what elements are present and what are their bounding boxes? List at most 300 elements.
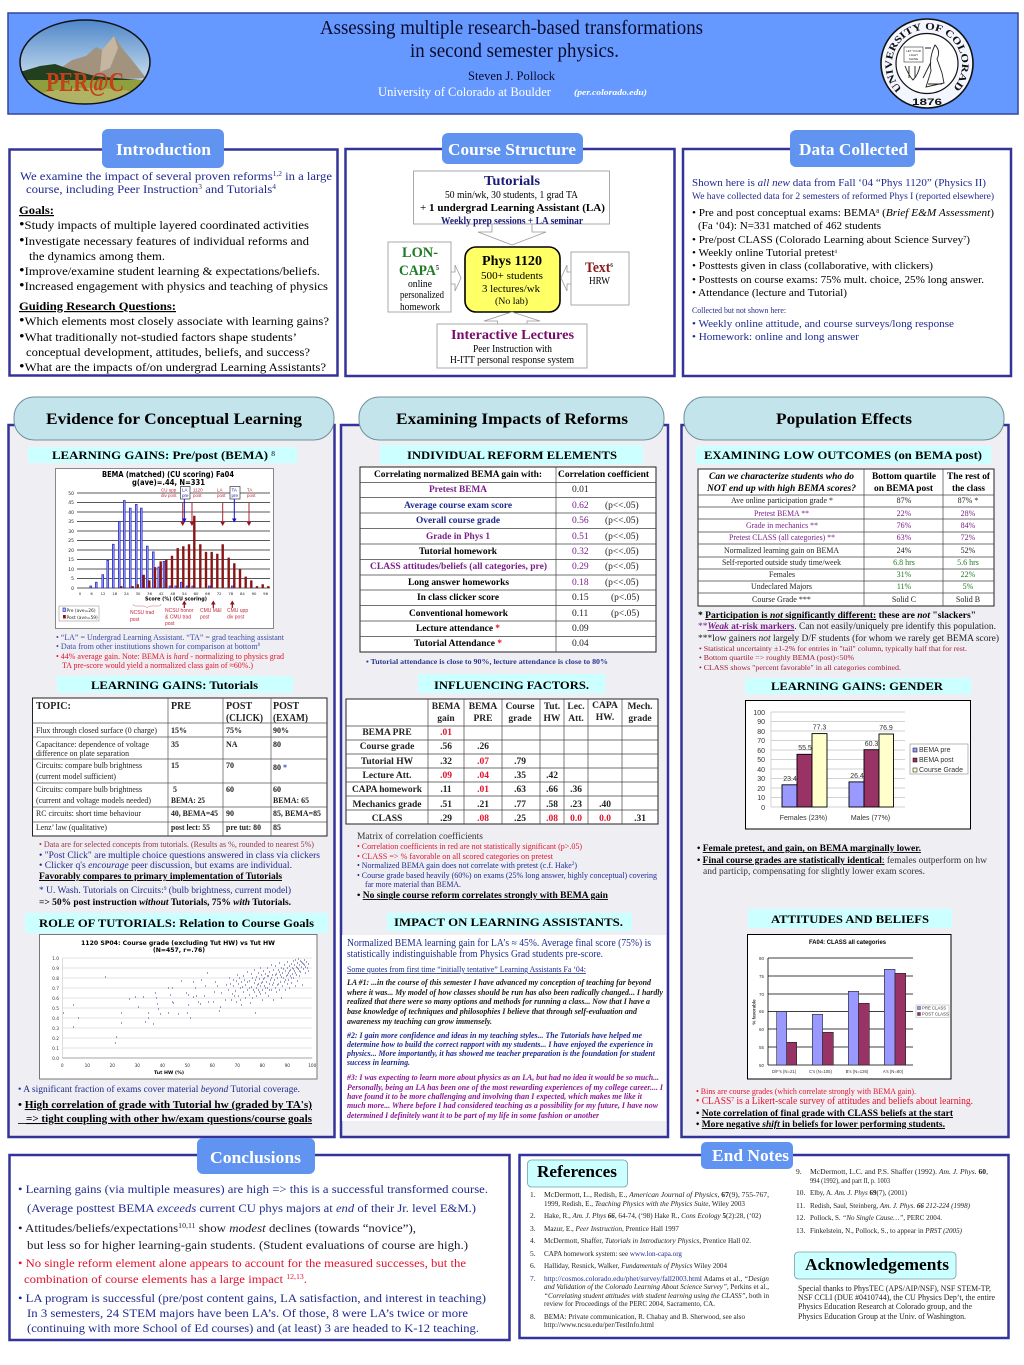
text: references 1-8: CAPA homework system: see www.lon-capa.org: [544, 1249, 682, 1258]
text: correlation matrix notes: • Course grade based heavily (60%) on exams (25% long answer, highly conceptual) covering: [357, 871, 657, 880]
bar chart: CLASS attitudes by grade: A's (N=80): [883, 1069, 904, 1074]
scatter plot: course grade vs tutorial homework: 70: [235, 1063, 240, 1069]
table: correlation matrix: .42: [546, 771, 558, 781]
annotations: other institutions: CMU M&I: [200, 608, 222, 614]
heading: Course Structure: Course Structure: [448, 140, 576, 159]
text: attitudes notes: 7: [731, 1097, 734, 1103]
panel: Conclusions: [10, 1138, 510, 1340]
table: correlation with BEMA gain: Conventional homework: [409, 608, 508, 618]
table: correlation matrix: .35: [514, 771, 526, 781]
legend: CLASS chart: PRE CLASS: [922, 1006, 946, 1011]
bar chart: BEMA pre/post histogram: 66: [205, 591, 211, 596]
table: correlation matrix: 0.0: [570, 814, 582, 824]
heading: Population Effects: [684, 397, 1004, 440]
bar chart: BEMA pre/post histogram: 42: [159, 591, 164, 596]
text: data collected list: (: [879, 207, 886, 219]
arrow: LON-CAPA to Phys 1120: [451, 265, 461, 291]
table: correlation matrix: .29: [440, 814, 452, 824]
text: introduction and goals: in a large: [282, 169, 332, 183]
bar chart: BEMA pre/post histogram: Score (%) (CU scoring): [145, 596, 207, 602]
text: low outcome notes: • CLASS shows "percent favorable" in all categories combined.: [699, 663, 901, 672]
annotations: other institutions: div post: [227, 614, 245, 620]
table: low outcome students: 5.6 hrs: [957, 558, 979, 567]
table: correlation with BEMA gain: Pretest BEMA: [429, 484, 488, 494]
box: Tutorials: + 1 undergrad Learning Assistant (LA): [420, 202, 605, 214]
box: Tutorials: Tutorials: [484, 174, 541, 189]
table: correlation matrix: Course grade: [360, 742, 414, 752]
box: LON-CAPA: personalized: [400, 290, 444, 301]
bar chart: BEMA pre/post histogram: 48: [170, 591, 176, 596]
annotations: other institutions: NCSU honor: [165, 608, 194, 614]
scatter plot: course grade vs tutorial homework: 0.7: [52, 986, 59, 992]
table: tutorial learning gains: Lenz’ law (qualitative): [36, 823, 107, 832]
bar chart: CLASS attitudes by grade: 75: [759, 974, 764, 979]
table: correlation matrix: .08: [546, 814, 558, 824]
text: low outcome notes: * Participation is not significantly different: these are not "slackers": [698, 611, 976, 621]
table: low outcome students: Pretest CLASS (all categories) **: [729, 533, 835, 542]
annotations: arrows for LA and TA scores: post: [217, 493, 226, 498]
text: introduction and goals: Goals:: [19, 203, 54, 217]
bar chart: CLASS attitudes by grade: [748, 934, 951, 1079]
subheading: Examining low outcomes: [696, 446, 991, 464]
table: correlation with BEMA gain: 0.04: [572, 639, 589, 649]
bar chart: BEMA pre/post histogram: 0: [71, 586, 74, 592]
legend: CLASS chart: POST CLASS: [922, 1012, 949, 1017]
annotations: arrows for LA and TA scores: pre: [232, 493, 239, 498]
annotations: other institutions: post: [200, 614, 210, 620]
table: correlation with BEMA gain: 0.15: [572, 593, 589, 603]
table: low outcome students: 24%: [897, 546, 912, 555]
scatter plot: course grade vs tutorial homework: 0.8: [52, 976, 59, 982]
subheading: Influencing factors: INFLUENCING FACTORS.: [434, 678, 589, 692]
text: introduction and goals: •Investigate necessary features of individual reforms and: [19, 233, 309, 249]
table: low outcome students: 76%: [897, 521, 912, 530]
text block: learning assistant quotes: realized that there were so many options and methods for running a class... Now that I have a: [347, 997, 650, 1006]
text: BEMA chart notes: • “LA” = Undergrad Learning Assistant. “TA” = grad teaching assistant: [56, 632, 285, 642]
scatter plot: course grade vs tutorial homework: 1120 SP04: Course grade (excluding Tut HW) vs Tut HW: [81, 939, 275, 947]
annotations: arrows for LA and TA scores: LA: [217, 488, 223, 493]
table: tutorial learning gains: PRE: [171, 701, 191, 712]
text: introduction and goals: •What traditionally not-studied factors shape students’: [19, 329, 297, 345]
bar chart: BEMA pre/post histogram: 84: [240, 591, 245, 596]
heading: Acknowledgements: Acknowledgements: [805, 1255, 949, 1274]
scatter plot: course grade vs tutorial homework: 0.3: [52, 1026, 59, 1032]
table: correlation matrix: .40: [599, 800, 611, 810]
bar chart: learning gains by gender: 76.9: [879, 725, 893, 732]
text: introduction and goals: 3: [198, 183, 203, 191]
text: data collected list: We have collected data for 2 semesters of reformed Phys I (reported elsewhere): [692, 191, 994, 202]
text: references 1-8: 2.: [530, 1211, 536, 1220]
scatter plot: course grade vs tutorial homework: 0.9: [52, 966, 59, 972]
text: conclusions list: 12,13: [286, 1273, 304, 1281]
text: introduction and goals: [19, 169, 332, 375]
scatter plot: course grade vs tutorial homework: 0.5: [52, 1006, 59, 1012]
heading: End Notes: End Notes: [712, 1146, 790, 1165]
icon: University of Colorado seal: [880, 18, 974, 109]
text: introduction and goals: •Improve/examine student learning & expectations/beliefs.: [19, 263, 320, 279]
bar chart: learning gains by gender: 100: [753, 710, 765, 717]
text: data collected list: 4: [834, 250, 838, 255]
bar chart: BEMA pre/post histogram: 18: [112, 591, 118, 596]
table: tutorial learning gains: 70: [226, 761, 234, 770]
text block: learning assistant quotes: determined I definitely want it to be part of my life in some fashion or another: [347, 1111, 600, 1120]
title: Assessing multiple research-based transformations: [320, 17, 703, 39]
text: data collected list: • Pre and post conceptual exams: BEMA: [692, 207, 872, 219]
bar chart: learning gains by gender: 20: [757, 786, 765, 793]
bar chart: BEMA pre/post histogram: 78: [228, 591, 234, 596]
bar chart: BEMA pre/post histogram: 60: [194, 591, 199, 596]
text: conclusions list: In 3 semesters, 24 STEM majors have been LA’s. Of those, 8 were LA’s twice or more: [27, 1308, 468, 1320]
box: Phys 1120: 500+ students: [481, 270, 543, 282]
scatter plot: course grade vs tutorial homework: 50: [185, 1063, 190, 1069]
scatter plot: course grade vs tutorial homework: 0: [61, 1063, 64, 1069]
text: low outcome notes: • Statistical uncertainty ±1-2% for entries in "tail" column, typically half that for rest.: [699, 644, 967, 653]
table: low outcome students: Solid B: [956, 595, 980, 604]
text: conclusions list: • Attitudes/beliefs/expectations: [18, 1223, 161, 1235]
annotations: arrows for LA and TA scores: 1120: [193, 488, 203, 493]
annotations: arrows for LA and TA scores: [161, 486, 256, 526]
scatter plot: course grade vs tutorial homework: 90: [285, 1063, 290, 1069]
table: tutorial learning gains: 15: [171, 761, 179, 770]
text: tutorial notes: • Clicker q's encourage peer discussion, but exams are individual.: [39, 861, 292, 871]
table: correlation matrix: .01: [440, 728, 452, 738]
bar chart: learning gains by gender: 80: [757, 729, 765, 736]
table: low outcome students: on BEMA post: [874, 484, 934, 494]
table: tutorial learning gains: 60: [226, 785, 234, 794]
annotations: other institutions: CMU upp: [227, 608, 248, 614]
bar chart: BEMA pre/post histogram: 10: [68, 567, 74, 573]
text: references 1-8: McDermott, L., Redish, E., American Journal of Physics, 67(9), 755-767,: [544, 1190, 769, 1199]
panel: End Notes: [520, 1142, 1008, 1338]
bar chart: learning gains by gender: [746, 700, 970, 829]
text: acknowledgements: Special thanks to PhysTEC (APS/AIP/NSF), NSF STEM-TP,: [798, 1283, 991, 1293]
bar chart: CLASS attitudes by grade: D/F's (N=21): [772, 1069, 797, 1074]
box: Phys 1120: Phys 1120: [482, 254, 542, 269]
logo: PER@C: PER@C: [46, 67, 124, 97]
text: conclusions list: (continuing with more School of Ed courses) and (at least) 3 are headed to K-12 teaching.: [27, 1323, 479, 1335]
table: correlation with BEMA gain: Correlation coefficient: [558, 469, 649, 479]
table: correlation with BEMA gain: 0.29: [572, 562, 589, 572]
text: references 9-13: McDermott, L.C. and P.S. Shaffer (1992). Am. J. Phys. 60,: [810, 1167, 988, 1176]
text: introduction and goals: We examine the impact of several proven reforms: [20, 169, 259, 183]
text block: learning assistant quotes: Personally, being an LA has been one of the most rewarding experiences of my college career.... I: [347, 1083, 664, 1092]
table: correlation matrix: PRE: [474, 714, 492, 724]
table: correlation with BEMA gain: 0.09: [572, 624, 589, 634]
title: [320, 17, 703, 62]
table: tutorial learning gains: 60: [273, 785, 281, 794]
text: low outcome notes: **Weak at-risk markers. Can not easily/uniquely pre identify this population.: [698, 621, 996, 632]
text: introduction and goals: conceptual development, attitudes, beliefs, and success?: [26, 345, 310, 359]
table: low outcome students: 22%: [897, 509, 912, 518]
scatter plot: course grade vs tutorial homework: 10: [85, 1063, 90, 1069]
table: low outcome students: the class: [952, 484, 985, 494]
text block: learning assistant quotes: awareness my teaching can grow immensely.: [347, 1017, 492, 1026]
text: introduction and goals: Guiding Research Questions:: [19, 299, 176, 313]
heading: References: References: [537, 1162, 617, 1181]
text: attitudes notes: is a Likert-scale survey of attitudes and beliefs about learning.: [734, 1096, 973, 1107]
text: references 1-8: 1999, Redish, E., Teaching Physics with the Physics Suite, Wiley 2003: [544, 1199, 745, 1208]
text: conclusions list: .: [304, 1274, 307, 1286]
table: tutorial learning gains: 80: [273, 740, 281, 749]
text: introduction and goals: •Which elements most closely associate with learning gains?: [19, 313, 329, 329]
bar chart: learning gains by gender: 70: [757, 738, 765, 745]
text: introduction and goals: •Increased engagement with physics and teaching of physics: [19, 278, 328, 294]
table: correlation matrix: gain: [437, 714, 455, 724]
bar chart: BEMA pre/post histogram: 36: [147, 591, 153, 596]
bar chart: learning gains by gender: 26.4: [850, 773, 864, 780]
table: tutorial learning gains: (current and voltage models needed): [36, 796, 151, 805]
table: correlation matrix: .66: [546, 785, 558, 795]
table: low outcome students: Self-reported outside study time/week: [722, 558, 841, 567]
annotations: arrows for LA and TA scores: div post: [161, 493, 177, 498]
text: correlation matrix notes: ): [574, 861, 577, 870]
scatter plot: course grade vs tutorial homework: 100: [308, 1063, 317, 1069]
bar chart: learning gains by gender: 90: [757, 719, 765, 726]
scatter plot: course grade vs tutorial homework: 60: [210, 1063, 215, 1069]
table: correlation matrix: .11: [440, 785, 452, 795]
table: tutorial learning gains: pre tut: 80: [226, 823, 261, 832]
panel: Evidence for Conceptual Learning: [8, 397, 334, 1137]
table: tutorial learning gains: 90%: [273, 726, 289, 735]
text: correlation matrix notes: Matrix of correlation coefficients: [357, 831, 484, 841]
text: conclusions list: modest declines (towards “novice”),: [229, 1223, 400, 1235]
box: LON-CAPA: CAPA: [399, 263, 440, 279]
text: references 9-13: 13.: [796, 1226, 806, 1235]
text: correlation matrix notes: • No single course reform correlates strongly with BEMA gain: [357, 890, 608, 900]
table: low outcome students: 72%: [961, 533, 976, 542]
box: LON-CAPA: homework: [400, 302, 440, 313]
table: correlation with BEMA gain: Grade in Phys 1: [426, 531, 491, 541]
bar chart: CLASS attitudes by grade: C's (N=105): [809, 1069, 833, 1074]
text: correlation matrix notes: [357, 831, 657, 900]
text: correlation matrix notes: 2: [572, 862, 575, 867]
legend: pre and post: Pre (ave=26): [66, 608, 96, 614]
text: references 9-13: 994 (1992), and part II, p. 1003: [810, 1176, 890, 1185]
table: low outcome students: Course Grade ***: [752, 595, 811, 604]
text: references 1-8: McDermott, Shaffer, Tutorials in Introductory Physics, Prentice Hall 02.: [544, 1236, 751, 1245]
text: attitudes notes: • Note correlation of final grade with CLASS beliefs at the start: [696, 1109, 954, 1119]
box: LON-CAPA: online: [408, 279, 433, 290]
header banner: [7, 12, 1019, 115]
box: Tutorials: [414, 171, 610, 227]
text: data collected list: • Posttests on course exams: 75% mult. choice, 25% long answer.: [692, 274, 984, 286]
table: correlation matrix: .09: [440, 771, 452, 781]
subheading: Learning gains tutorials: LEARNING GAINS: Tutorials: [91, 678, 258, 692]
panel: Course Structure: [346, 133, 674, 376]
bar chart: learning gains by gender: 10: [757, 795, 765, 802]
text: references 1-8: [530, 1190, 769, 1329]
text: tutorial correlation conclusions: • High correlation of grade with Tutorial hw (graded by TA's): [18, 1100, 313, 1111]
table: tutorial learning gains: POST: [273, 701, 299, 712]
title: in second semester physics.: [410, 40, 619, 62]
table: correlation with BEMA gain: CLASS attitudes/beliefs (all categories, pre): [370, 561, 547, 571]
table: tutorial learning gains: 40, BEMA=45: [171, 809, 218, 818]
text: references 1-8: Hake, R., Am. J. Phys 66, 64-74, (‘98) Hake R., Cons Ecology 5(2):28, (‘02): [544, 1211, 761, 1220]
scatter plot: course grade vs tutorial homework: 40: [160, 1063, 165, 1069]
text block: learning assistant quotes: much more... Where before I had considered teaching as a possibility for my future, I have now: [347, 1101, 659, 1110]
bar chart: learning gains by gender: 60: [757, 748, 765, 755]
text: introduction and goals: 1,2: [273, 170, 282, 178]
text: references 1-8: 6.: [530, 1261, 536, 1270]
table: correlation matrix: [346, 699, 658, 824]
table: tutorial learning gains: 15%: [171, 726, 187, 735]
table: correlation with BEMA gain: Tutorial Attendance *: [414, 638, 503, 648]
table: correlation matrix: CAPA: [592, 701, 618, 711]
table: correlation with BEMA gain: Overall course grade: [416, 515, 500, 525]
bar chart: learning gains by gender: 50: [757, 757, 765, 764]
text: references 9-13: Pollock, S. “No Single Cause…”, PERC 2004.: [810, 1213, 942, 1222]
table: tutorial learning gains: 85: [273, 823, 281, 832]
text: references 1-8: 1.: [530, 1190, 536, 1199]
table: correlation with BEMA gain: Long answer homeworks: [408, 577, 510, 587]
table: correlation matrix: BEMA PRE: [362, 728, 412, 738]
box: Phys 1120: (No lab): [495, 296, 528, 306]
box: Tutorials: Weekly prep sessions + LA seminar: [441, 216, 584, 227]
text block: learning assistant quotes: LA #1: ...in the course of this semester I have advanced my conception of teaching far beyond: [346, 978, 652, 987]
table: correlation matrix: CAPA homework: [352, 785, 423, 795]
panel: Population Effects: [682, 397, 1008, 1137]
text: attitudes notes: • Bins are course grades (which correlate strongly with BEMA gain).: [696, 1086, 916, 1096]
text: data collected list: Brief E&M Assessment): [886, 207, 994, 219]
table: correlation matrix: .79: [514, 757, 526, 767]
text: attitudes notes: • CLASS: [696, 1096, 733, 1107]
text: references 1-8: 4.: [530, 1236, 536, 1245]
table: tutorial learning gains: Flux through closed surface (0 charge): [36, 726, 157, 735]
table: correlation matrix: .25: [514, 814, 526, 824]
table: correlation with BEMA gain: 0.01: [572, 485, 589, 495]
table: low outcome students: Normalized learning gain on BEMA: [724, 546, 839, 555]
annotations: other institutions: post: [165, 621, 175, 627]
author and affiliation: Steven J. Pollock: [468, 68, 555, 83]
text: references 1-8: and Validation of the Colorado Learning About Science Survey”, Perkins et al.,: [544, 1282, 769, 1291]
table: low outcome students: 87%: [897, 496, 912, 505]
text: conclusions list: [18, 1184, 488, 1335]
table: correlation matrix: .21: [477, 800, 489, 810]
text: tutorial notes: (bulb brightness, current model): [166, 885, 291, 896]
text block: learning assistant quotes: success in learning.: [346, 1058, 410, 1067]
heading: Evidence for Conceptual Learning: [14, 397, 334, 440]
text block: learning assistant quotes: Normalized BEMA learning gain for LA’s ≈ 45%. Average final score (75%) is: [347, 938, 651, 949]
bar chart: BEMA pre/post histogram: 96: [263, 591, 269, 596]
bar chart: BEMA pre/post histogram: 90: [252, 591, 257, 596]
subheading: Learning gains tutorials: [57, 676, 293, 693]
table: correlation with BEMA gain: Tutorial homework: [419, 546, 497, 556]
annotations: other institutions: NCSU trad: [130, 610, 154, 616]
note: attendance: • Tutorial attendance is close to 90%, lecture attendance is close to 80%: [366, 657, 608, 666]
scatter plot: course grade vs tutorial homework: 20: [110, 1063, 115, 1069]
annotations: arrows for LA and TA scores: post: [247, 493, 256, 498]
table: low outcome students: Pretest BEMA **: [754, 509, 809, 518]
text: low outcome notes: ***low gainers not largely D/F students (for whom we rarely get BEMA score): [698, 633, 999, 644]
table: tutorial learning gains: NA: [226, 740, 238, 749]
subheading: Impact on learning assistants: [387, 913, 632, 931]
scatter plot: course grade vs tutorial homework: 0.4: [52, 1016, 59, 1022]
arrow: Tutorials to Phys 1120: [478, 224, 546, 245]
table: low outcome students: [698, 469, 994, 606]
arrow: Text to Phys 1120: [561, 265, 571, 291]
box: Interactive Lectures: Peer Instruction with: [473, 344, 552, 355]
heading: Data Collected: [790, 130, 915, 167]
annotations: arrows for LA and TA scores: post: [193, 493, 202, 498]
table: correlation with BEMA gain: (p<<.05): [605, 546, 639, 557]
text block: learning assistant quotes: base knowledge of techniques and philosophies I believe that through self-evaluation and: [347, 1007, 638, 1016]
text: tutorial notes: • Data are for selected concepts from tutorials. (Results as %, rounded to nearest 5%): [39, 840, 314, 849]
heading: Data Collected: Data Collected: [799, 140, 909, 159]
table: low outcome students: Females: [769, 570, 795, 579]
table: tutorial learning gains: 35: [171, 740, 179, 749]
scatter plot: course grade vs tutorial homework: 30: [135, 1063, 140, 1069]
box: Phys 1120: 3 lectures/wk: [482, 283, 540, 295]
subheading: Learning gains gender: [745, 678, 971, 694]
text: references 9-13: Redish, Saul, Steinberg, Am. J. Phys. 66 212-224 (1998): [810, 1201, 970, 1210]
text: data collected list: [692, 177, 994, 343]
subheading: Learning gains gender: LEARNING GAINS: GENDER: [771, 679, 943, 693]
bar chart: BEMA pre/post histogram: 35: [68, 519, 74, 525]
table: correlation with BEMA gain: (p<<.05): [605, 577, 639, 588]
bar chart: BEMA pre/post histogram: 45: [68, 500, 74, 506]
text: references 9-13: [796, 1167, 988, 1235]
text: references 9-13: 12.: [796, 1213, 806, 1222]
table: correlation with BEMA gain: (p<.05): [611, 592, 639, 603]
text: data collected list: • Attendance (lecture and Tutorial): [692, 287, 847, 299]
text: data collected list: • Homework: online and long answer: [692, 331, 859, 343]
text: references 1-8: “Correlating student attitudes with student learning using the CLASS”, both in: [544, 1291, 769, 1300]
annotations: arrows for LA and TA scores: TA: [247, 488, 252, 493]
table: correlation matrix: grade: [508, 714, 532, 724]
table: correlation matrix: .04: [477, 771, 489, 781]
bar chart: learning gains by gender: Females (23%): [780, 815, 827, 822]
table: tutorial learning gains: 80 *: [273, 763, 287, 772]
text: correlation matrix notes: • CLASS => % favorable on all scored categories on pretest: [357, 852, 554, 861]
text: acknowledgements: Physics Education Group at the Univ. of Washington.: [798, 1311, 966, 1321]
table: correlation matrix: .77: [514, 800, 526, 810]
table: correlation matrix: .56: [440, 742, 452, 752]
text block: learning assistant quotes: Some quotes from first time “initially tentative” Learning Assistants Fa ‘04:: [347, 965, 586, 974]
subheading: Impact on learning assistants: IMPACT ON LEARNING ASSISTANTS.: [394, 915, 623, 929]
table: low outcome students: 28%: [961, 509, 976, 518]
bar chart: BEMA pre/post histogram: 30: [136, 591, 141, 596]
heading: Acknowledgements: [794, 1252, 956, 1279]
text: correlation matrix notes: • Correlation coefficients in red are not statistically significant (p>.05): [357, 842, 582, 851]
subheading: Learning gains pre/post: 8: [271, 450, 276, 458]
bar chart: CLASS attitudes by grade: % favorable: [752, 999, 756, 1025]
table: correlation matrix: .23: [570, 800, 582, 810]
text: gender notes: • Final course grades are statistically identical : females outperform on hw: [697, 855, 988, 865]
text: conclusions list: show: [196, 1223, 229, 1235]
text: introduction and goals: and Tutorials: [202, 182, 273, 196]
subheading: Influencing factors: [418, 674, 605, 693]
table: low outcome students: Can we characterize students who do: [709, 472, 854, 482]
bar chart: learning gains by gender: 55.5: [798, 745, 812, 752]
bar chart: BEMA pre/post histogram: 0: [79, 591, 82, 596]
box: Interactive Lectures: H-ITT personal response system: [450, 355, 574, 366]
text: references 1-8: http://www.ncsu.edu/per/TestInfo.html: [544, 1320, 654, 1329]
heading: Introduction: [102, 129, 224, 168]
bar chart: CLASS attitudes by grade: 70: [759, 992, 764, 997]
text: attitudes notes: • More negative shift in beliefs for lower performing students.: [696, 1120, 945, 1130]
table: correlation matrix: .08: [477, 814, 489, 824]
table: low outcome students: Grade in mechanics **: [746, 521, 818, 530]
heading: Population Effects: Population Effects: [776, 411, 912, 428]
table: correlation with BEMA gain: In class clicker score: [417, 592, 499, 602]
scatter plot: course grade vs tutorial homework: 80: [260, 1063, 265, 1069]
logo: PER@C: [20, 20, 150, 108]
text: data collected list: • Posttests given in class (collaborative, with clickers): [692, 260, 933, 272]
table: correlation matrix: Tut.: [544, 702, 560, 712]
box: LON-CAPA: [388, 242, 451, 313]
subheading: Learning gains pre/post: [28, 447, 297, 463]
bar chart: learning gains by gender: 23.4: [783, 776, 797, 783]
